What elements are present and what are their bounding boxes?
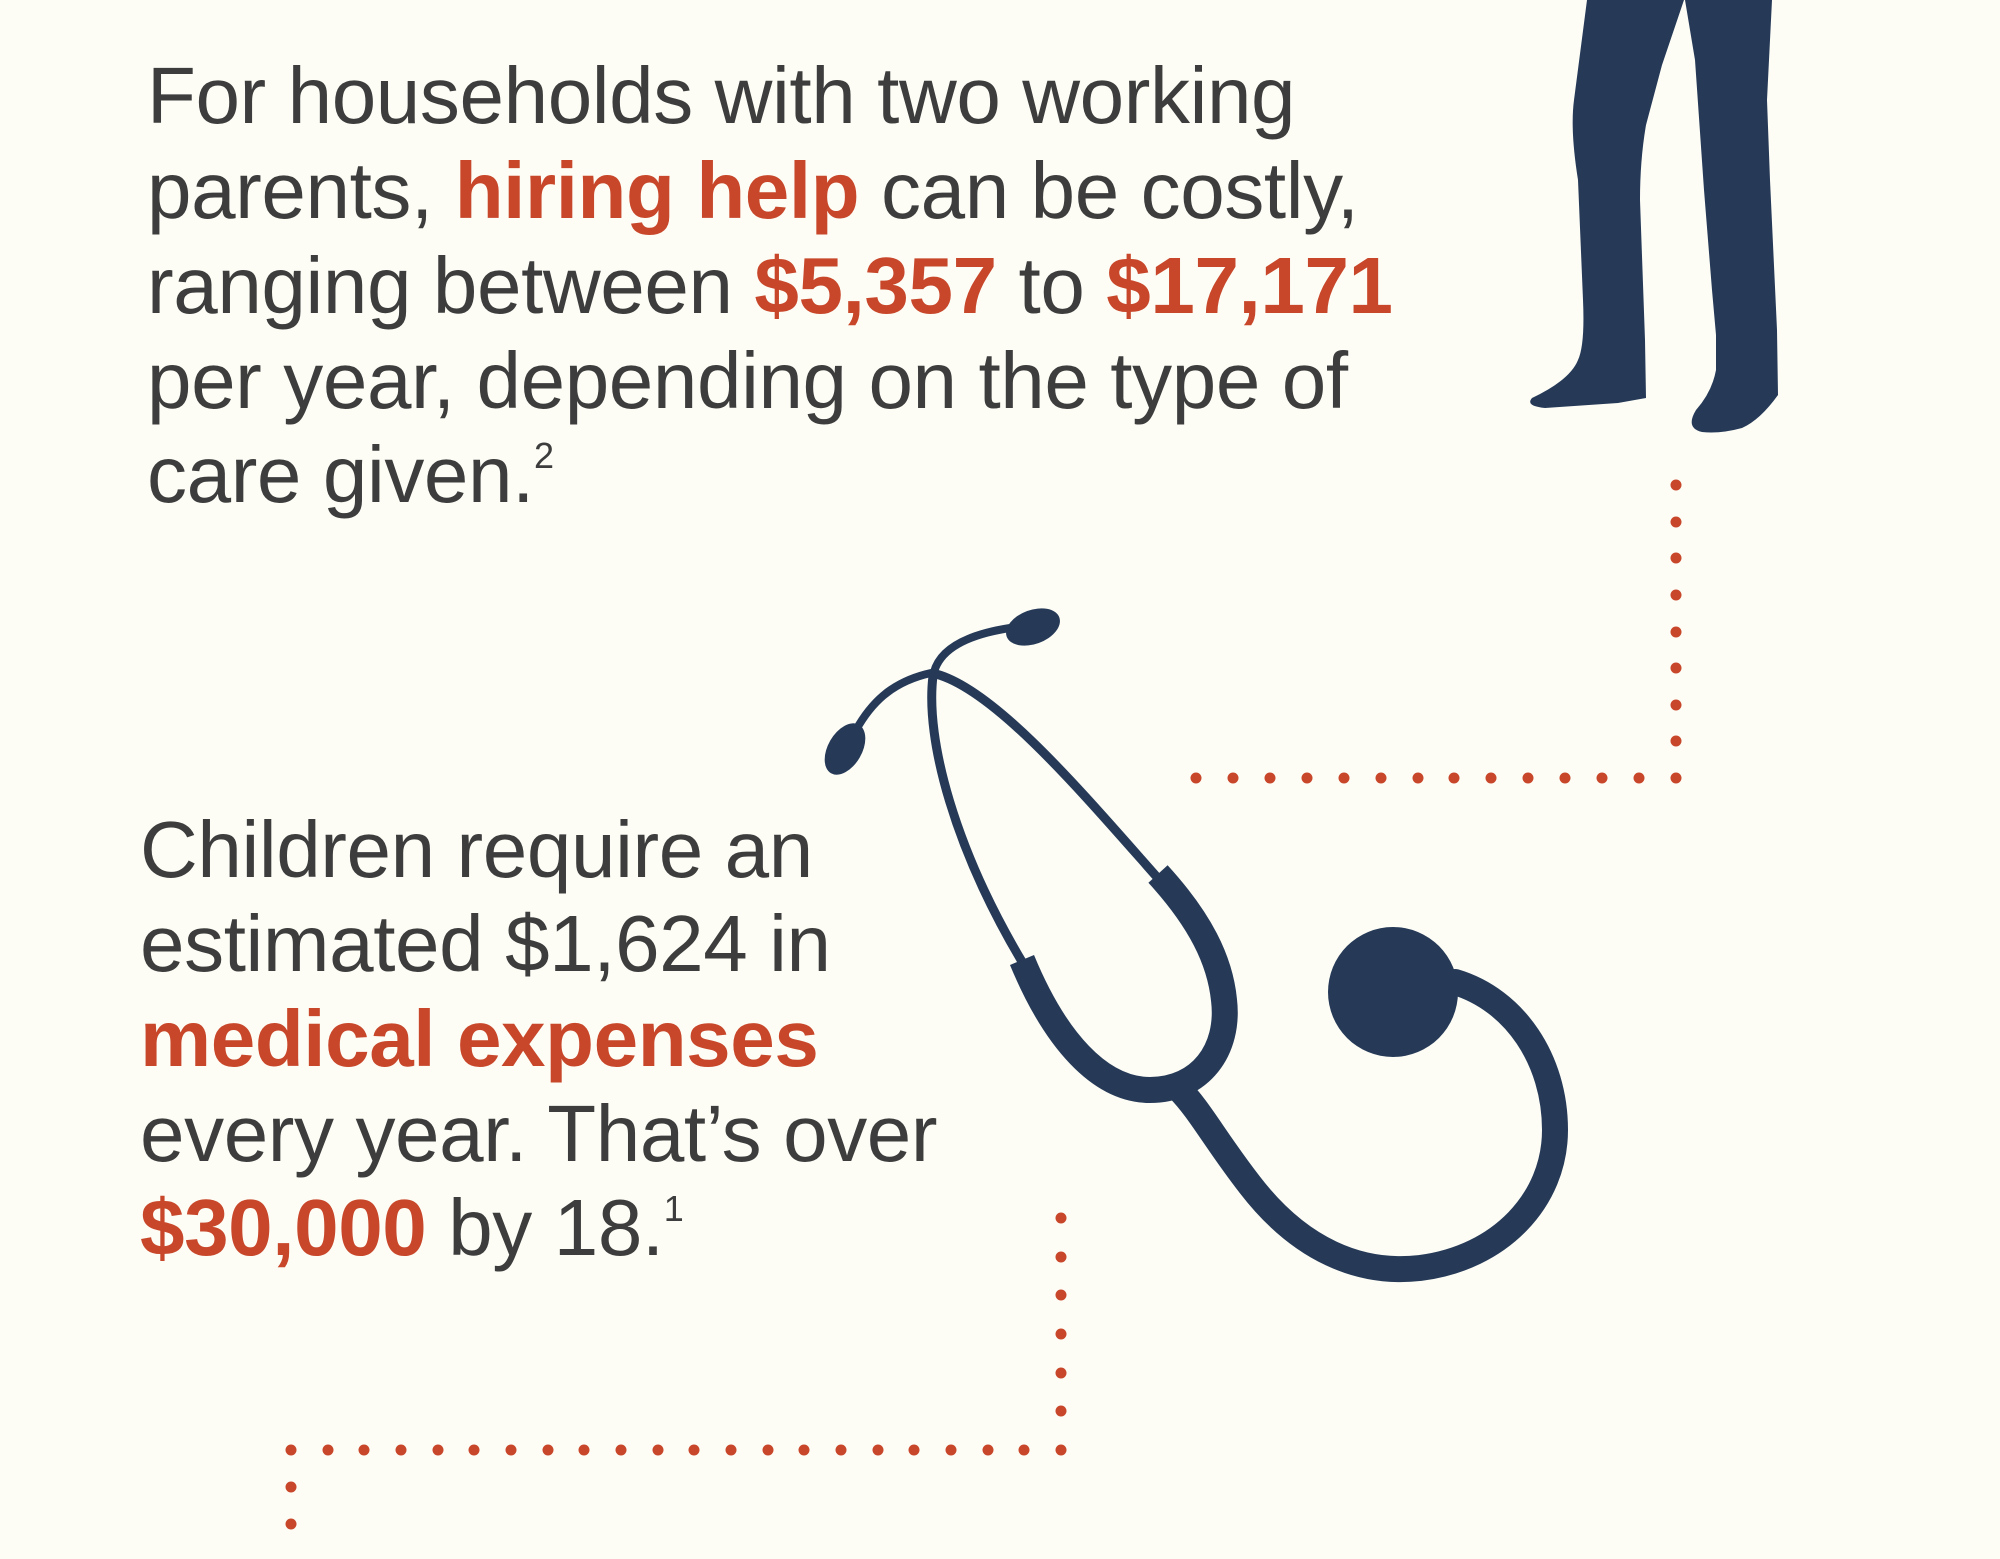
text block: hiring help: For households with two working (147, 51, 1295, 140)
text block: hiring help: 2 (534, 435, 554, 476)
text block: medical expenses: every year. That’s over (140, 1089, 937, 1178)
dotted connector: top (1190, 480, 1682, 784)
text block: hiring help: ranging between $5,357 to $17,171 (147, 241, 1393, 330)
text block: hiring help (147, 51, 1393, 519)
text block: hiring help: care given. (147, 430, 534, 519)
text block: medical expenses: Children require an (140, 805, 813, 894)
text block: hiring help: per year, depending on the type of (147, 336, 1349, 425)
text block: medical expenses: estimated $1,624 in (140, 899, 831, 988)
text block: medical expenses (140, 805, 937, 1272)
dotted connector: bottom (286, 1212, 1066, 1530)
text block: medical expenses: medical expenses (140, 994, 818, 1083)
text block: medical expenses: $30,000 by 18. (140, 1183, 664, 1272)
icon: legs silhouette (1530, 0, 1778, 432)
icon: stethoscope (816, 601, 1555, 1269)
text block: hiring help: parents, hiring help can be costly, (147, 146, 1359, 235)
text block: medical expenses: 1 (664, 1188, 683, 1229)
